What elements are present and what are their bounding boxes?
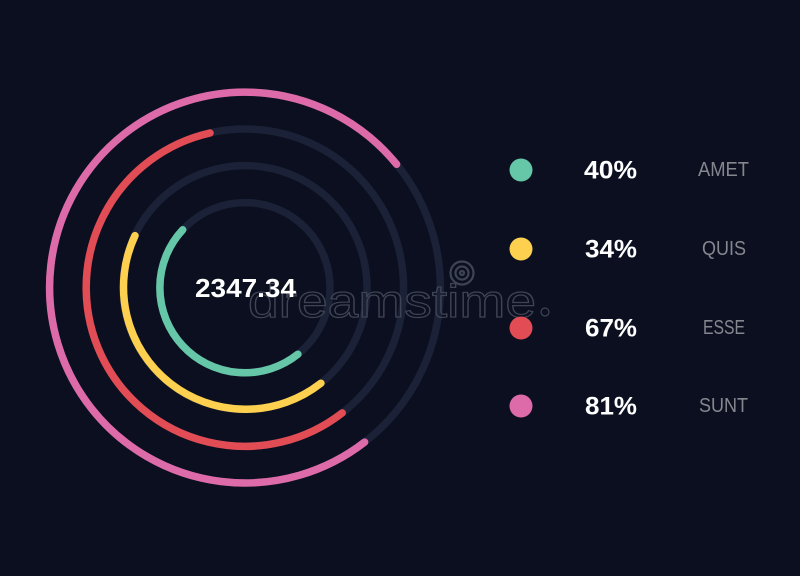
legend row: esse — [510, 314, 745, 342]
percent: quis: 34% — [585, 236, 637, 264]
label: sunt: SUNT — [699, 395, 748, 417]
center total value: 2347.34 — [195, 273, 297, 303]
percent: amet: 40% — [584, 156, 637, 184]
dot: quis — [510, 238, 532, 260]
dot: amet — [510, 158, 532, 182]
label: esse: ESSE — [703, 317, 745, 339]
arc: sunt 81% — [50, 92, 397, 483]
dot: esse — [510, 316, 532, 340]
dot: sunt — [510, 394, 532, 418]
legend — [510, 156, 749, 420]
label: amet: AMET — [698, 159, 749, 181]
legend row: quis — [510, 236, 746, 264]
ring track: third — [123, 166, 367, 410]
radial progress chart — [50, 92, 440, 483]
watermark — [248, 262, 549, 327]
legend row: sunt — [510, 392, 748, 420]
percent: sunt: 81% — [585, 392, 637, 420]
legend row: amet — [510, 156, 749, 184]
ring track: outer — [50, 92, 440, 483]
percent: esse: 67% — [585, 314, 637, 342]
arc: quis 34% — [124, 236, 321, 409]
label: quis: QUIS — [702, 238, 746, 260]
ring track: inner — [160, 203, 330, 373]
watermark wordmark: dreamstime — [248, 275, 536, 327]
watermark spiral icon — [450, 262, 474, 284]
arc: amet 40% — [160, 230, 298, 373]
ring track: second — [86, 129, 404, 446]
arc: esse 67% — [86, 133, 342, 446]
watermark registered mark — [541, 308, 549, 316]
